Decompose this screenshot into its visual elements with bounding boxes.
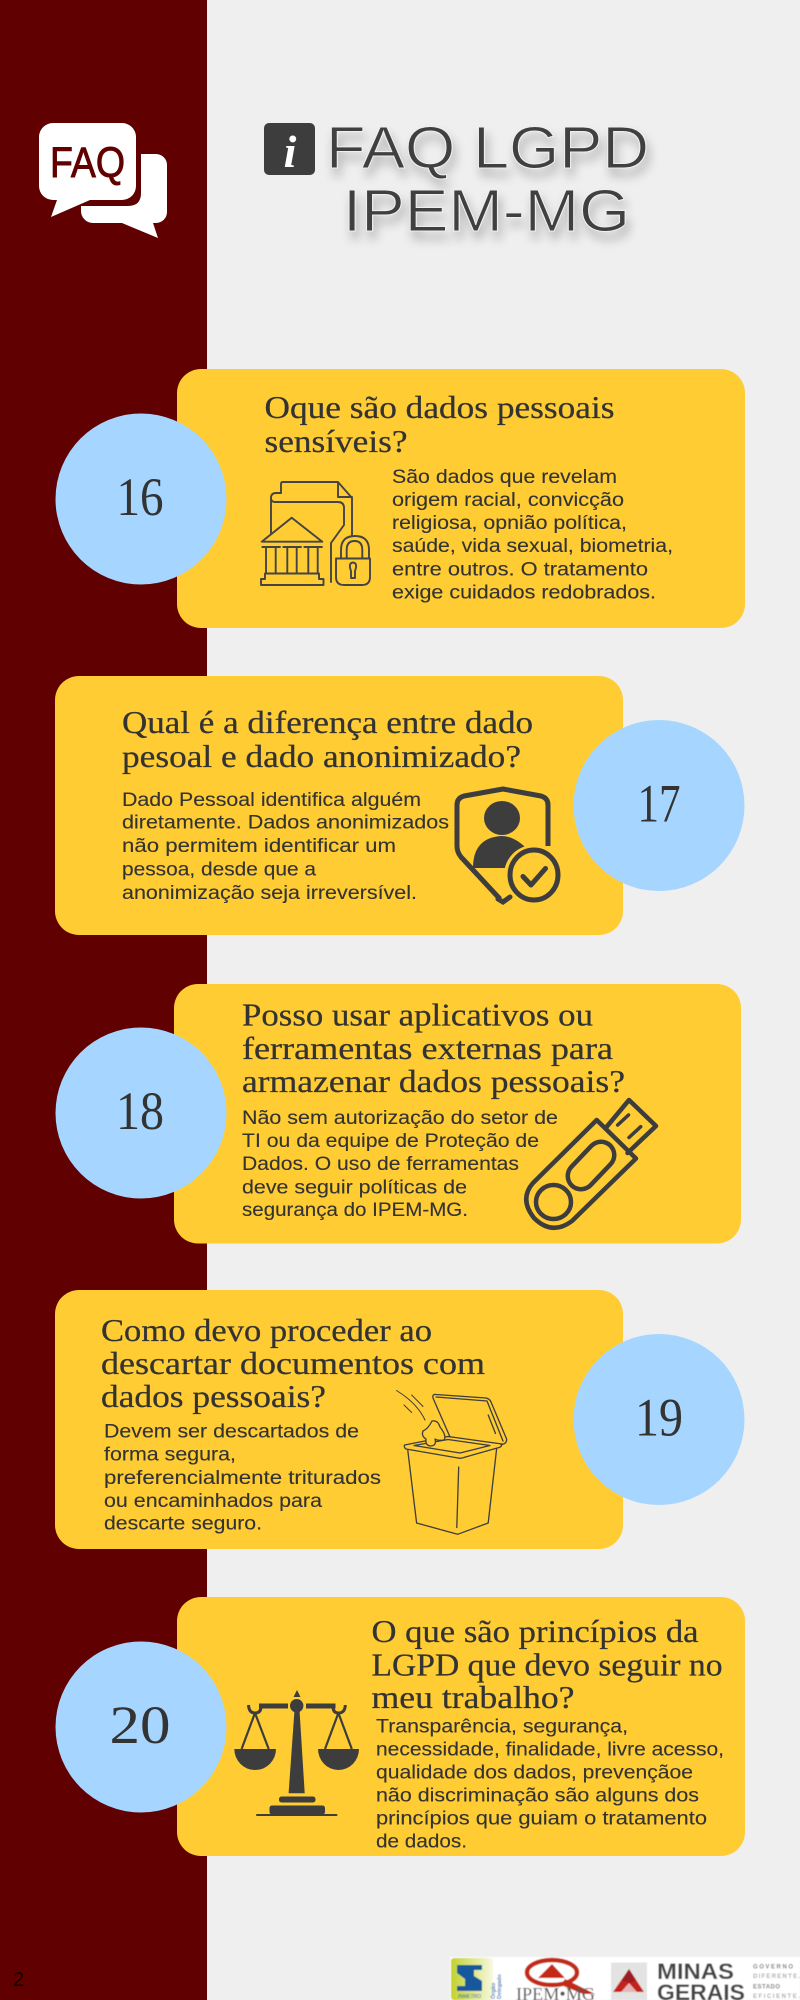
icon: shield with person and check: [457, 789, 564, 905]
text: answer 20: princípios que guiam o tratamento: [376, 1808, 707, 1830]
logo: Inmetro: [451, 1958, 503, 2000]
heading: question 18: [242, 996, 625, 1099]
logo: IPEM-MG: [516, 1960, 595, 2000]
text: answer 16: saúde, vida sexual, biometria,: [392, 536, 673, 557]
maroon sidebar: [0, 0, 207, 2000]
title: [264, 115, 649, 244]
logo: Minas Gerais: DIFERENTE.: [753, 1974, 800, 1980]
text: answer 19: [104, 1422, 381, 1534]
text: answer 19: ou encaminhados para: [104, 1491, 322, 1512]
text: answer 18: Dados. O uso de ferramentas: [242, 1154, 519, 1175]
logo: Minas Gerais: ESTADO: [753, 1984, 780, 1990]
icon: info square: i: [284, 126, 297, 177]
text: answer 20: necessidade, finalidade, livre acesso,: [376, 1740, 724, 1760]
text: answer 18: segurança do IPEM-MG.: [242, 1200, 468, 1221]
circle: number 18: 18: [116, 1081, 164, 1141]
heading: question 18: armazenar dados pessoais?: [242, 1063, 625, 1099]
circle: number 19: [574, 1334, 744, 1505]
circle: number 17: 17: [638, 774, 680, 834]
icon: info square: [264, 123, 315, 177]
circle: number 20: [56, 1642, 226, 1812]
logo: Minas Gerais: EFICIENTE.: [753, 1994, 800, 2000]
text: answer 16: entre outros. O tratamento: [392, 560, 648, 580]
text: answer 17: não permitem identificar um: [122, 836, 396, 857]
heading: question 20: LGPD que devo seguir no: [372, 1646, 722, 1682]
text: answer 16: origem racial, convicção: [392, 490, 624, 511]
heading: question 19: [101, 1312, 485, 1414]
heading: question 17: Qual é a diferença entre dado: [122, 704, 533, 740]
text: answer 17: Dado Pessoal identifica alguém: [122, 790, 421, 811]
circle: number 17: [574, 720, 744, 891]
text: answer 17: pessoa, desde que a: [122, 860, 316, 880]
text: answer 19: forma segura,: [104, 1444, 236, 1466]
logo: Minas Gerais: [611, 1959, 800, 2000]
panel: question 19: [55, 1290, 623, 1549]
text: answer 20: de dados.: [376, 1832, 467, 1852]
heading: question 16: sensíveis?: [264, 423, 408, 459]
text: answer 16: [392, 467, 673, 604]
title line 2: IPEM-MG: [343, 178, 630, 244]
logo strip: [450, 1957, 800, 2000]
text: answer 17: [122, 790, 449, 904]
text: answer 16: exige cuidados redobrados.: [392, 582, 656, 604]
circle: number 19: 19: [635, 1388, 683, 1448]
heading: question 16: Oque são dados pessoais: [264, 389, 614, 425]
text: answer 20: [376, 1716, 724, 1852]
heading: question 19: descartar documentos com: [101, 1345, 485, 1381]
circle: number 18: [56, 1028, 226, 1198]
text: answer 18: [242, 1108, 558, 1221]
text: answer 17: diretamente. Dados anonimizados: [122, 812, 449, 834]
text: answer 19: Devem ser descartados de: [104, 1422, 359, 1442]
heading: question 20: O que são princípios da: [372, 1613, 698, 1649]
icon: document, institution and padlock: [261, 482, 370, 585]
icon: trash bin with paper: [396, 1390, 507, 1534]
heading: question 18: ferramentas externas para: [242, 1030, 613, 1066]
text: answer 17: anonimização seja irreversível.: [122, 883, 417, 904]
heading: question 20: meu trabalho?: [372, 1679, 574, 1715]
icon: scales of justice: [234, 1690, 359, 1816]
text: answer 19: descarte seguro.: [104, 1514, 262, 1534]
logo: Minas Gerais: GOVERNO: [753, 1964, 793, 1970]
logo: Inmetro: INMETRO: [458, 1994, 481, 2000]
text: answer 20: Transparência, segurança,: [376, 1716, 628, 1738]
icon: FAQ speech bubbles: FAQ: [50, 139, 125, 187]
text: answer 20: qualidade dos dados, prevençãoe: [376, 1762, 693, 1784]
panel: question 16: [177, 369, 745, 628]
circle: number 16: [56, 414, 226, 584]
heading: question 17: [122, 704, 533, 774]
circle: number 16: 16: [116, 467, 164, 527]
text: answer 18: Não sem autorização do setor de: [242, 1108, 558, 1129]
text: answer 20: não discriminação são alguns dos: [376, 1786, 699, 1806]
icon: USB drive: [526, 1100, 656, 1228]
heading: question 19: dados pessoais?: [101, 1378, 326, 1414]
heading: question 19: Como devo proceder ao: [101, 1312, 432, 1348]
text: answer 19: preferencialmente triturados: [104, 1468, 381, 1489]
heading: question 16: [264, 389, 614, 459]
panel: question 18: [174, 984, 741, 1244]
circle: number 20: 20: [110, 1695, 170, 1755]
panel: question 17: [55, 676, 623, 935]
text: answer 16: São dados que revelam: [392, 467, 617, 488]
logo: Minas Gerais: MINAS: [657, 1959, 734, 1984]
text: answer 18: TI ou da equipe de Proteção de: [242, 1131, 539, 1152]
icon: FAQ speech bubbles: [39, 123, 167, 238]
heading: question 20: [372, 1613, 722, 1715]
heading: question 17: pesoal e dado anonimizado?: [122, 738, 521, 774]
page number: 2: [13, 1969, 24, 1991]
panel: question 20: [177, 1597, 745, 1856]
heading: question 18: Posso usar aplicativos ou: [242, 996, 593, 1032]
text: answer 16: religiosa, opnião política,: [392, 513, 627, 534]
title line 1: FAQ LGPD: [326, 115, 649, 181]
logo: Inmetro: Delegado: [497, 1974, 503, 1999]
text: answer 18: deve seguir políticas de: [242, 1178, 467, 1198]
logo: Inmetro: Órgão: [489, 1982, 497, 1999]
